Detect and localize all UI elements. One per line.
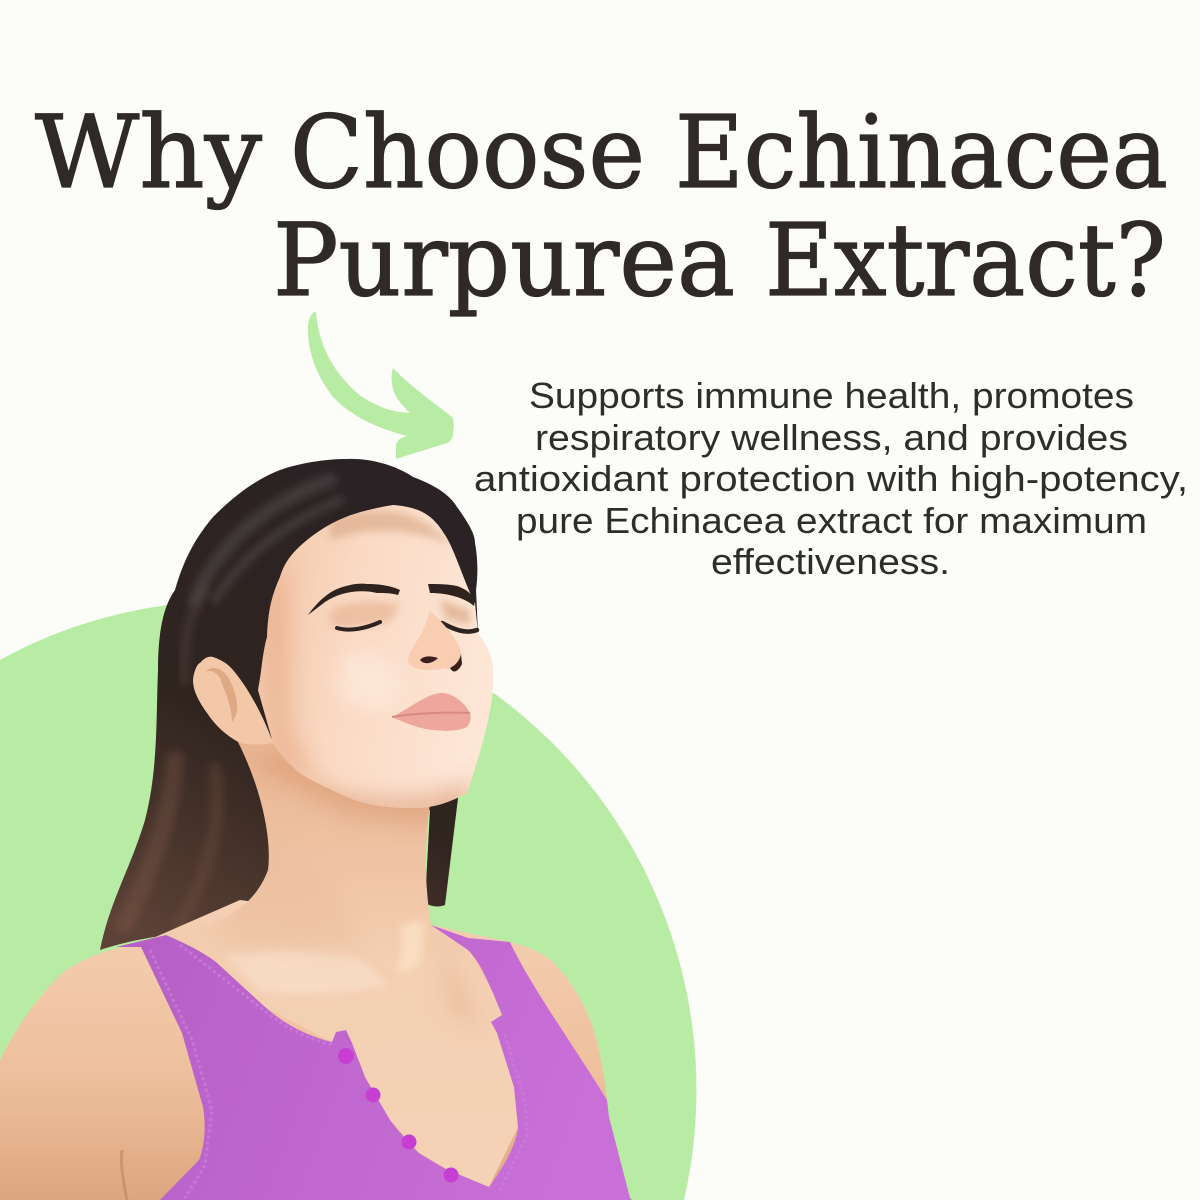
description text (474, 375, 1188, 582)
buttons (338, 1048, 458, 1182)
title: Extract? (765, 202, 1166, 319)
right eyebrow (428, 584, 475, 606)
title: Choose (290, 94, 645, 211)
description text: pure Echinacea extract for maximum (516, 500, 1147, 541)
left eye (337, 622, 380, 630)
title: Why (35, 94, 263, 211)
arrow (308, 312, 454, 459)
title: Echinacea (675, 94, 1168, 211)
description text: Supports immune health, promotes (529, 375, 1134, 416)
description text: effectiveness. (711, 541, 950, 582)
description text: antioxidant protection with high-potency, (474, 458, 1188, 499)
lips (392, 693, 471, 731)
hair (100, 459, 478, 950)
neck shadows (232, 752, 472, 1018)
neck and chest (170, 735, 518, 1187)
top (116, 925, 632, 1200)
nose shadow (420, 654, 462, 671)
face (258, 505, 493, 808)
face shading (255, 511, 470, 820)
right eye (442, 623, 477, 632)
description text: respiratory wellness, and provides (535, 417, 1128, 458)
green circle (0, 600, 696, 1200)
left eyebrow (308, 584, 400, 615)
top seams (150, 945, 527, 1198)
body skin (0, 900, 607, 1200)
title (35, 94, 1168, 319)
nose (408, 610, 461, 670)
title: Purpurea (273, 202, 735, 319)
ear (193, 657, 273, 744)
woman photo illustration (0, 459, 632, 1200)
ear inner (205, 668, 237, 722)
armpit crease (121, 1150, 127, 1200)
lip line (392, 713, 470, 717)
hair highlights (125, 480, 340, 925)
